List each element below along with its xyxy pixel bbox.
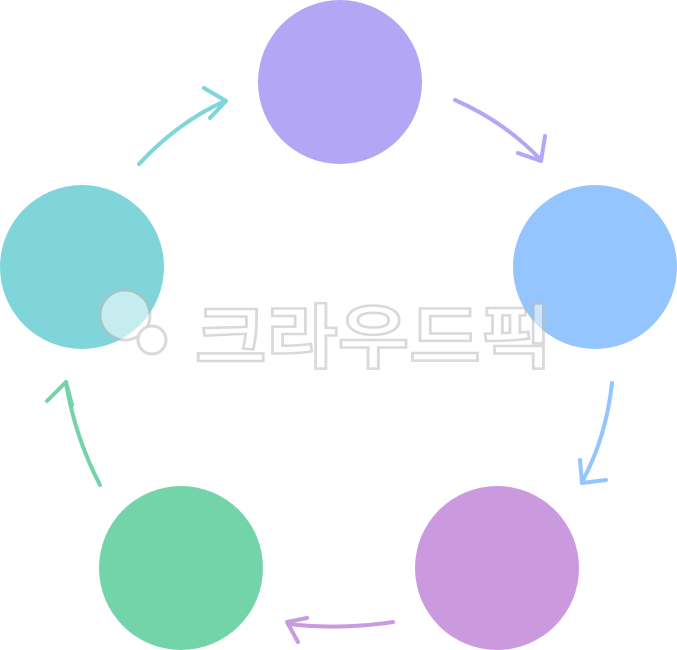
circle: bottom right: [415, 486, 579, 650]
arrow: bottom right to bottom left: [287, 618, 393, 642]
arrow: bottom left to left: [47, 382, 100, 485]
circle: left: [0, 185, 164, 349]
arrow: left to top: [139, 88, 226, 164]
circle: bottom left: [99, 486, 263, 650]
watermark: [100, 290, 552, 377]
arrow: top to right: [455, 100, 545, 161]
arrow: right to bottom right: [580, 383, 612, 483]
watermark: 크라우드픽: [195, 299, 552, 377]
circle: right: [513, 185, 677, 349]
circle: top: [258, 0, 422, 164]
